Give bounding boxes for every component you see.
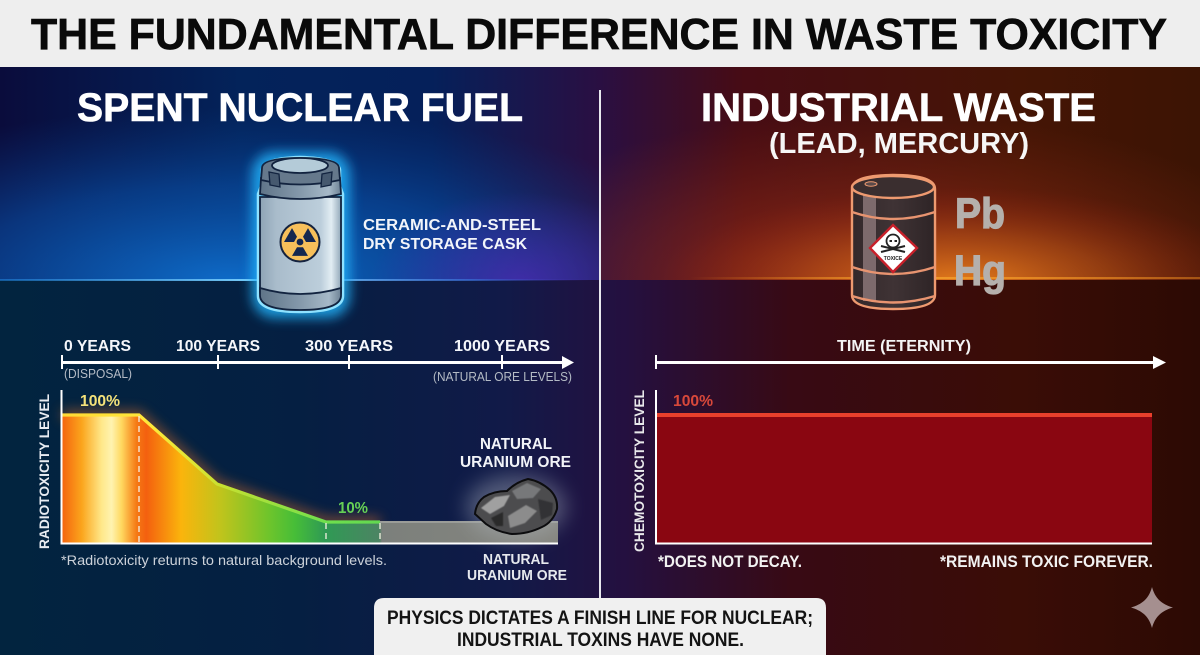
heading: industrial waste: INDUSTRIAL WASTE (701, 86, 1096, 130)
label: natural uranium ore, below (467, 552, 567, 584)
value: 100 percent: 100% (673, 393, 713, 410)
label: natural uranium ore, above: URANIUM ORE (460, 454, 571, 471)
timeline: eternity: TIME (ETERNITY) (837, 338, 971, 355)
icon: uranium ore rock (466, 475, 566, 539)
label: cask: CERAMIC-AND-STEEL (363, 217, 541, 234)
chemical symbols: lead and mercury: Pb (955, 190, 1005, 238)
label: natural uranium ore, below: NATURAL (483, 552, 549, 568)
timeline: nuclear (61, 338, 574, 384)
chart: chemotoxicity constant (631, 390, 1152, 552)
note: does not decay: *DOES NOT DECAY. (658, 553, 802, 571)
timeline: nuclear: 0 YEARS (64, 338, 131, 355)
label: natural uranium ore, above: NATURAL (480, 436, 552, 453)
axis label: radiotoxicity level: RADIOTOXICITY LEVEL (36, 394, 52, 549)
icon: dry storage cask (252, 152, 350, 318)
icon: radiation symbol (280, 222, 320, 262)
callout: conclusion (374, 598, 826, 655)
timeline: nuclear: 1000 YEARS (454, 338, 550, 355)
axis label: chemotoxicity level: CHEMOTOXICITY LEVEL (631, 390, 647, 552)
callout: conclusion: PHYSICS DICTATES A FINISH LINE FOR NUCLEAR; (387, 608, 813, 629)
timeline: nuclear: 300 YEARS (305, 338, 393, 355)
label: cask (363, 217, 541, 253)
icon: sparkle (1131, 587, 1173, 628)
center divider (599, 90, 601, 598)
timeline: eternity (655, 338, 1166, 369)
value: 100 percent: 100% (80, 393, 120, 410)
label: natural uranium ore, below: URANIUM ORE (467, 568, 567, 584)
timeline: nuclear: 100 YEARS (176, 338, 260, 355)
timeline: nuclear: (DISPOSAL) (64, 366, 132, 381)
icon: toxic hazard diamond: TOXICE (884, 256, 903, 262)
title banner: THE FUNDAMENTAL DIFFERENCE IN WASTE TOXICITY (31, 10, 1167, 59)
chemical symbols: lead and mercury (954, 190, 1006, 295)
label: natural uranium ore, above (460, 436, 571, 471)
value: 10 percent: 10% (338, 500, 368, 517)
chart: radiotoxicity decay (36, 390, 558, 549)
note: remains toxic forever: *REMAINS TOXIC FOREVER. (940, 553, 1153, 571)
callout: conclusion: INDUSTRIAL TOXINS HAVE NONE. (457, 630, 744, 651)
heading: spent nuclear fuel: SPENT NUCLEAR FUEL (77, 86, 523, 130)
footnote: radiotoxicity: *Radiotoxicity returns to natural background levels. (61, 552, 387, 568)
chemical symbols: lead and mercury: Hg (954, 247, 1006, 295)
label: cask: DRY STORAGE CASK (363, 236, 527, 253)
heading: industrial waste (701, 86, 1096, 160)
timeline: nuclear: (NATURAL ORE LEVELS) (433, 369, 572, 384)
heading: industrial waste: (LEAD, MERCURY) (769, 128, 1029, 160)
icon: toxic barrel (852, 175, 935, 309)
panel: spent nuclear fuel (36, 86, 574, 584)
panel: industrial waste (631, 86, 1166, 571)
